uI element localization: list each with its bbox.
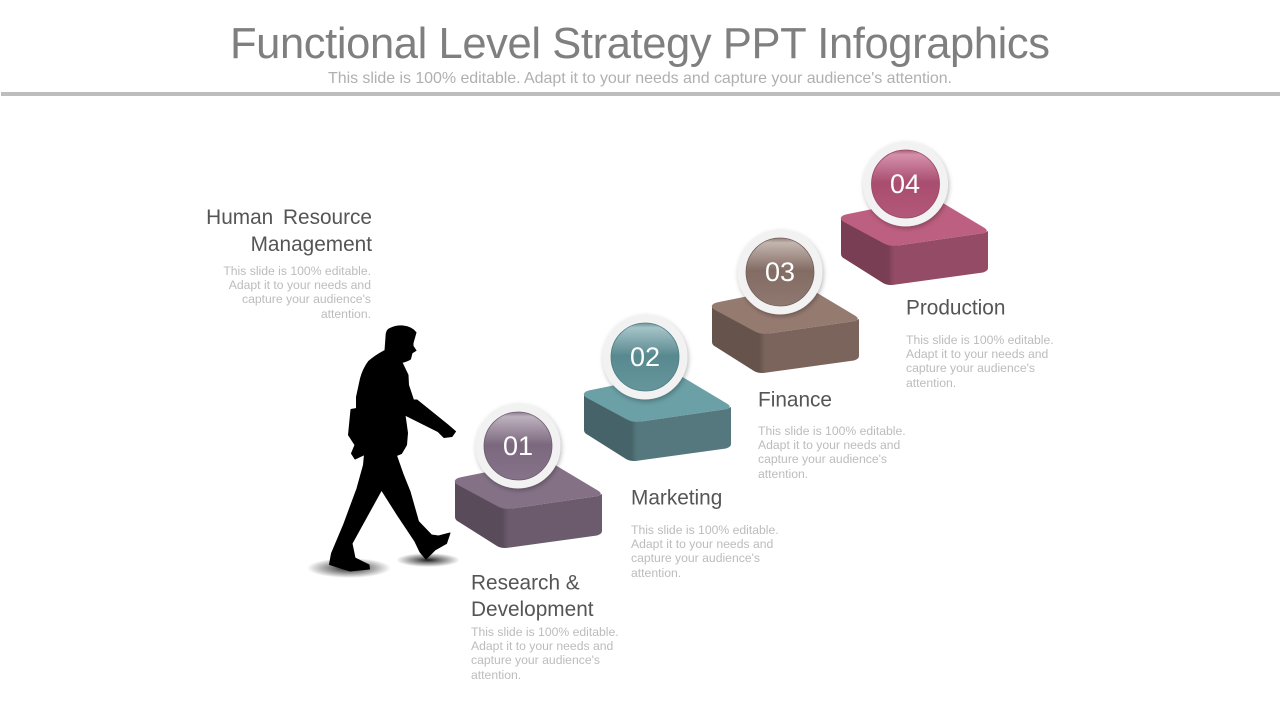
badge 03: 03	[765, 257, 795, 287]
text block: marketing description: Adapt it to your needs and	[631, 537, 773, 551]
text block: human resource description: capture your audience's	[242, 292, 371, 306]
block 04	[840, 203, 988, 285]
text block: human resource description: Adapt it to your needs and	[229, 278, 371, 292]
block 01	[454, 465, 602, 548]
block 03	[712, 293, 859, 373]
panel: human resource management	[206, 206, 372, 321]
text block: production description: Adapt it to your needs and	[906, 347, 1048, 361]
panel: step 04 production	[831, 142, 1054, 390]
title: Functional Level Strategy PPT Infographics	[230, 20, 1050, 68]
text block: finance description: Adapt it to your needs and	[758, 438, 900, 452]
block 02	[584, 377, 731, 461]
badge 01	[476, 404, 560, 488]
panel: step 01 research and development	[445, 404, 619, 682]
text block: research description: capture your audience's	[471, 653, 600, 667]
text block: finance description: capture your audience's	[758, 452, 887, 466]
text block: research description: attention.	[471, 668, 521, 682]
heading: research and development: Development	[471, 598, 594, 621]
icon: walking man silhouette	[307, 326, 460, 578]
panel: step 03 finance	[702, 230, 906, 481]
badge 03	[738, 230, 822, 314]
heading: human resource management: Management	[251, 233, 372, 256]
heading: marketing: Marketing	[631, 486, 722, 510]
text block: marketing description: This slide is 100% editable.	[631, 523, 779, 537]
heading: finance: Finance	[758, 388, 832, 412]
badge 02: 02	[630, 342, 660, 372]
text block: research description: This slide is 100% editable.	[471, 625, 619, 639]
badge 04: 04	[890, 169, 920, 199]
panel: step 02 marketing	[574, 314, 779, 580]
text block: marketing description: attention.	[631, 566, 681, 580]
text block: finance description: attention.	[758, 467, 808, 481]
heading: human resource management: Human Resource	[206, 206, 372, 229]
text block: marketing description: capture your audience's	[631, 551, 760, 565]
heading: research and development: Research &	[471, 572, 580, 594]
text block: finance description: This slide is 100% editable.	[758, 424, 906, 438]
heading: production: Production	[906, 296, 1005, 320]
text block: human resource description: This slide is 100% editable.	[223, 264, 371, 278]
text block: production description: attention.	[906, 376, 956, 390]
badge 02	[602, 314, 688, 400]
text block: production description: This slide is 100% editable.	[906, 333, 1054, 347]
subtitle: This slide is 100% editable. Adapt it to your needs and capture your audience's attention.	[328, 70, 952, 87]
text block: human resource description: attention.	[321, 307, 371, 321]
text block: production description: capture your audience's	[906, 361, 1035, 375]
text block: research description: Adapt it to your needs and	[471, 639, 613, 653]
badge 04	[863, 142, 948, 226]
badge 01: 01	[503, 431, 533, 461]
